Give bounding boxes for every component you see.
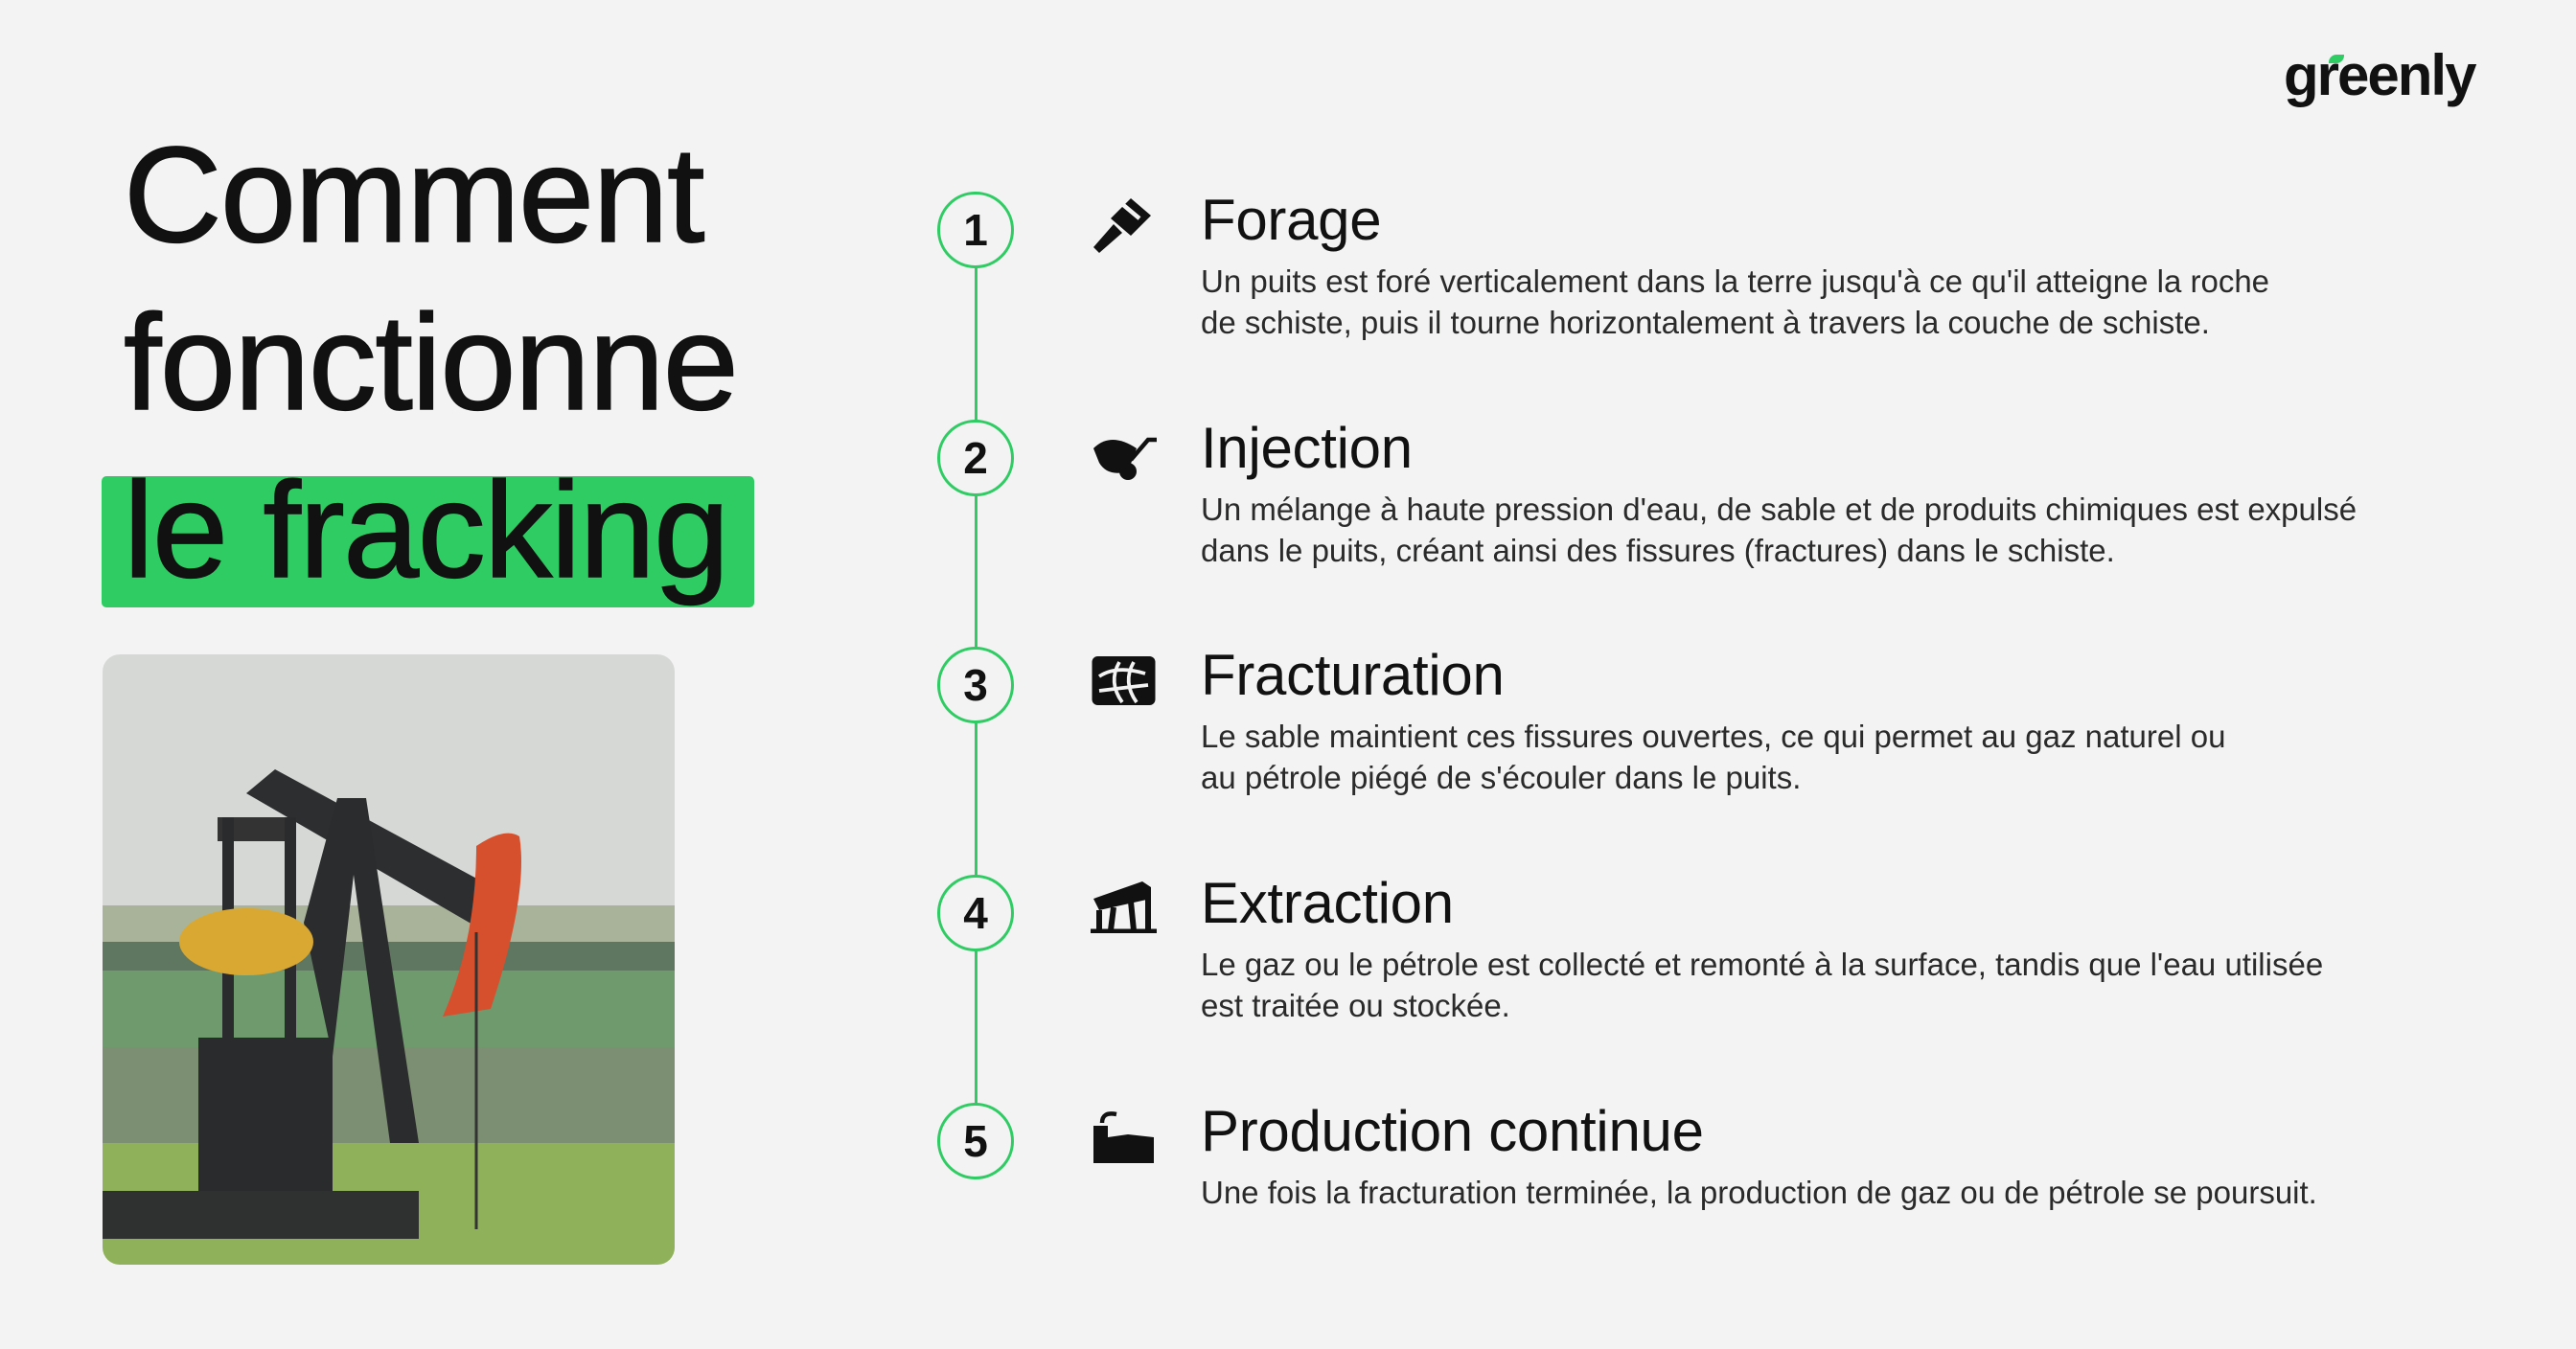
step 3 number: [937, 647, 1014, 723]
step 4 number: 4: [963, 888, 988, 938]
step 2 number: [937, 420, 1014, 496]
step 4 number: [937, 875, 1014, 951]
step 3 number: 3: [963, 660, 988, 710]
step 4: Extraction: est traitée ou stockée.: [1201, 988, 1510, 1023]
icon: pumpjack: [1091, 881, 1157, 933]
step 1: Forage: [1201, 188, 2269, 340]
step 4: Extraction: Extraction: [1201, 871, 1454, 935]
step 3: Fracturation: Fracturation: [1201, 643, 1505, 707]
step 1: Forage: Un puits est foré verticalement dans la terre jusqu'à ce qu'il atteigne la roche: [1201, 263, 2269, 299]
step 3: Fracturation: au pétrole piégé de s'écouler dans le puits.: [1201, 760, 1801, 795]
step 3: Fracturation: Le sable maintient ces fissures ouvertes, ce qui permet au gaz naturel ou: [1201, 719, 2225, 754]
step 2: Injection: dans le puits, créant ainsi des fissures (fractures) dans le schiste.: [1201, 533, 2115, 568]
step 5 number: 5: [963, 1116, 988, 1166]
title: Comment: [124, 119, 703, 271]
timeline line: [975, 230, 978, 1141]
step 5 number: [937, 1103, 1014, 1179]
step 4: Extraction: [1201, 871, 2323, 1023]
title: le fracking: [124, 454, 728, 606]
step 5: Production continue: [1201, 1099, 2317, 1210]
step 2: Injection: Injection: [1201, 416, 1413, 480]
icon: wheelbarrow: [1093, 437, 1157, 480]
step 1: Forage: Forage: [1201, 188, 1381, 252]
step 2: Injection: [1201, 416, 2357, 568]
step 2: Injection: Un mélange à haute pression d'eau, de sable et de produits chimiques est expulsé: [1201, 492, 2357, 527]
icon: fracture: [1092, 656, 1156, 705]
step 5: Production continue: Une fois la fracturation terminée, la production de gaz ou de pétrole se poursuit.: [1201, 1175, 2317, 1210]
step 4: Extraction: Le gaz ou le pétrole est collecté et remonté à la surface, tandis que l'eau utilisée: [1201, 947, 2323, 982]
step 1 number: 1: [963, 205, 988, 255]
step 1 number: [937, 192, 1014, 268]
step 1: Forage: de schiste, puis il tourne horizontalement à travers la couche de schiste.: [1201, 305, 2210, 340]
step 2 number: 2: [963, 433, 988, 483]
logo: greenly: [2284, 43, 2474, 107]
title: fonctionne: [124, 286, 737, 439]
photo: pumpjack: [103, 654, 675, 1265]
step 5: Production continue: Production continue: [1201, 1099, 1704, 1163]
step 3: Fracturation: [1201, 643, 2225, 795]
icon: factory: [1093, 1111, 1154, 1163]
title: [102, 119, 754, 607]
icon: drill: [1093, 198, 1151, 253]
title highlight: [102, 476, 754, 607]
